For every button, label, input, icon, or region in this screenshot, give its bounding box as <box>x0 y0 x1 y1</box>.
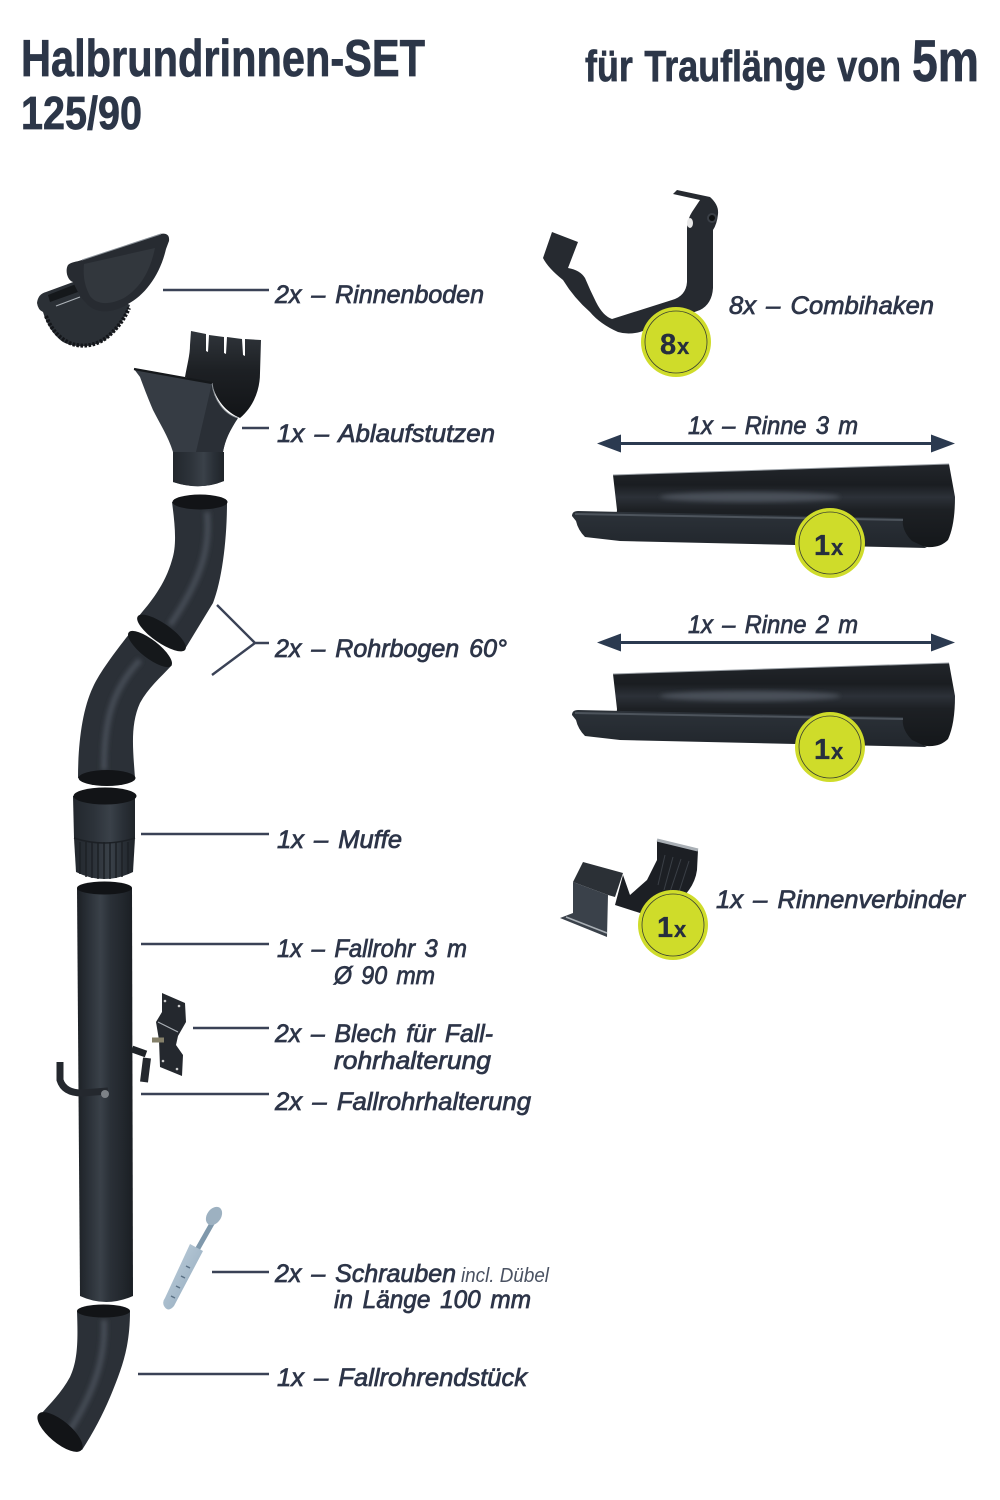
label <box>274 1260 550 1314</box>
badge: 1x: 1 <box>814 734 830 766</box>
part: Muffe <box>73 788 402 879</box>
label: 1x – Fallrohrendstück <box>277 1364 529 1392</box>
badge: 1x: 1 <box>657 912 673 944</box>
label: 1x – Fallrohr 3 m <box>277 935 467 963</box>
leader line <box>138 1373 269 1375</box>
label: rohrhalterung <box>334 1047 491 1075</box>
label: in Länge 100 mm <box>334 1286 531 1314</box>
icon: socket <box>73 788 136 879</box>
label: incl. Dübel <box>461 1265 550 1287</box>
part: Fallrohr <box>77 882 467 1302</box>
subtitle: eaves length: für Trauflänge von <box>585 42 901 91</box>
icon: gutter end cap <box>37 234 169 346</box>
part: Ablaufstutzen <box>134 331 495 486</box>
badge: 1x: 1 <box>814 530 830 562</box>
icon: pipe clips <box>60 1049 147 1098</box>
badge: 8x <box>641 307 711 377</box>
leader line <box>212 1271 269 1273</box>
part: Fallrohrhalterung <box>60 1049 531 1116</box>
label: 2x – Rohrbogen 60° <box>274 635 507 663</box>
arrow: length <box>597 634 955 652</box>
icon: mounting plate <box>152 993 186 1076</box>
icon: gutter <box>572 663 955 747</box>
part: Schrauben <box>163 1204 550 1314</box>
label: 1x – Ablaufstutzen <box>277 420 495 448</box>
icon: lower pipe bend <box>78 625 177 786</box>
label <box>274 1020 493 1075</box>
leader line <box>242 427 269 429</box>
title: 125/90 <box>21 87 142 139</box>
part: Blech für Fallrohrhalterung <box>152 993 493 1076</box>
icon: upper pipe bend <box>132 494 228 657</box>
badge: 8x: x <box>677 334 690 359</box>
title: Halbrundrinnen-SET <box>21 30 425 88</box>
label: 2x – Rinnenboden <box>274 281 484 309</box>
arrow: length <box>597 434 955 452</box>
part: Rinnenverbinder <box>560 840 967 960</box>
label: 8x – Combihaken <box>729 292 934 320</box>
label: 1x – Rinne 3 m <box>688 412 858 440</box>
badge: 1x <box>795 712 865 782</box>
badge: 8x: 8 <box>660 329 676 361</box>
leader bracket <box>212 605 269 675</box>
label: 1x – Rinne 2 m <box>688 611 858 639</box>
part: Rinnenboden <box>37 234 484 346</box>
label: Ø 90 mm <box>333 962 435 990</box>
icon: gutter outlet <box>134 331 261 486</box>
label <box>277 935 467 990</box>
icon: gutter connector <box>560 840 698 937</box>
leader line <box>193 1027 269 1029</box>
part: Rinne 2m <box>572 611 955 782</box>
part: Combihaken <box>543 190 934 377</box>
badge: 1x <box>795 508 865 578</box>
title <box>21 30 425 139</box>
subtitle: eaves length: 5m <box>912 29 979 94</box>
leader line <box>141 943 269 945</box>
leader line <box>163 289 269 291</box>
label: 2x – Blech für Fall- <box>274 1020 493 1048</box>
icon: gutter hook <box>543 190 718 334</box>
badge: 1x: x <box>831 739 844 764</box>
badge: 1x: x <box>674 917 687 942</box>
label: 1x – Muffe <box>277 826 402 854</box>
icon: hook holes <box>687 213 717 228</box>
icon: gutter <box>572 464 955 548</box>
badge: 1x <box>638 890 708 960</box>
badge: 1x: x <box>831 535 844 560</box>
icon: screw and wall plug <box>163 1204 225 1310</box>
icon: downpipe <box>77 882 133 1302</box>
part: Rohrbogen <box>78 494 507 786</box>
label: 2x – Fallrohrhalterung <box>274 1088 531 1116</box>
part: Rinne 3m <box>572 412 955 578</box>
part: Fallrohrendstück <box>31 1304 529 1458</box>
leader line <box>141 1093 269 1095</box>
leader line <box>141 833 269 835</box>
label: 1x – Rinnenverbinder <box>716 886 967 914</box>
icon: pipe end <box>31 1304 130 1458</box>
label: 2x – Schrauben <box>274 1260 456 1288</box>
